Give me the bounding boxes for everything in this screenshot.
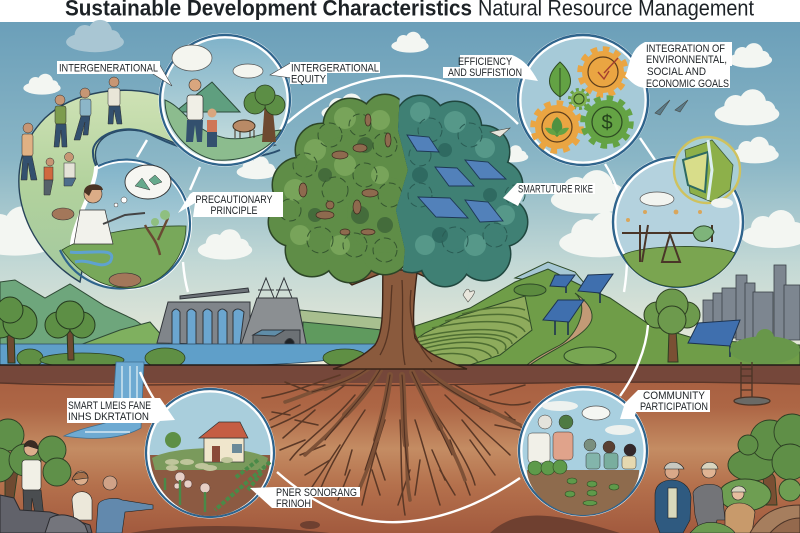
label: efficiency and sufficiency: EFFICIENCY bbox=[458, 56, 512, 68]
label: precautionary principle: PRECAUTIONARY bbox=[196, 194, 272, 206]
S-shaped ribbon panel: intergenerational equity and precaution bbox=[19, 90, 280, 282]
circle panel: efficiency and goals gears bbox=[518, 35, 648, 165]
circle panel: intergenerational equity bbox=[160, 35, 290, 165]
clouds bbox=[0, 20, 800, 260]
background sky bbox=[0, 22, 800, 367]
hills left bbox=[0, 280, 382, 345]
hydro dam bbox=[157, 278, 307, 350]
circle panel: farm and smart land use bbox=[146, 389, 274, 517]
label: community participation: PARTICIPATION bbox=[640, 401, 708, 413]
gear: sprout bbox=[533, 103, 581, 151]
circle panel: weather and climate with globe bbox=[613, 157, 743, 287]
canopy left half: ecosystem bbox=[268, 94, 408, 284]
circle panel: community participation bbox=[519, 387, 647, 515]
small birds and leaves bbox=[463, 100, 688, 302]
canopy right half: solar panels bbox=[379, 96, 527, 286]
city skyline bbox=[703, 265, 800, 343]
label: efficiency and sufficiency: AND SUFFISTION bbox=[448, 67, 522, 79]
tree canopy bbox=[269, 95, 527, 286]
white connecting ring bbox=[137, 76, 657, 522]
solar panels on hill bbox=[543, 274, 740, 357]
label: lower right of farm circle: FRINOH bbox=[276, 498, 311, 510]
people bottom left bbox=[22, 440, 153, 533]
label: lower right of farm circle: PNER SONORANG bbox=[276, 487, 357, 499]
label: intergenerational: INTERGENERATIONAL bbox=[59, 62, 158, 74]
label: integration of goals bbox=[625, 42, 732, 90]
label: integration of goals: ENVIRONNENTAL, bbox=[646, 54, 727, 66]
label: smart infrastructure bbox=[503, 183, 595, 206]
label: lower right of farm circle bbox=[250, 487, 360, 510]
label: smart infrastructure: SMARTUTURE RIKE bbox=[518, 184, 593, 196]
rocks bottom right bbox=[750, 505, 800, 533]
shrubs far right bbox=[730, 329, 800, 364]
tree on right hill bbox=[644, 289, 700, 362]
label: community participation bbox=[620, 390, 710, 419]
foreground tree bottom right bbox=[719, 414, 800, 511]
label: precautionary principle: PRINCIPLE bbox=[210, 205, 258, 217]
label: integration of goals: SOCIAL AND bbox=[647, 66, 706, 78]
tree trunk bbox=[318, 250, 470, 369]
gear: small connector bbox=[570, 90, 588, 108]
gear: target bbox=[580, 49, 626, 95]
label: smart land use bbox=[67, 398, 175, 423]
label: precautionary principle bbox=[178, 192, 283, 217]
people bottom right bbox=[655, 462, 755, 533]
trees left of dam bbox=[0, 297, 95, 363]
label: smart land use: SMART LMEIS FANE bbox=[68, 400, 151, 412]
people walking on ribbon bbox=[21, 77, 122, 195]
right hill with terraces bbox=[415, 262, 800, 365]
title bbox=[0, 0, 800, 22]
circle panel: precautionary principle bbox=[52, 160, 190, 288]
label: intergenerational bbox=[57, 61, 172, 86]
label: intergenerational equity: EQUITY bbox=[291, 74, 326, 86]
waterfall bbox=[64, 362, 144, 438]
riverbank bushes bbox=[17, 348, 367, 368]
label: smart land use: INHS DKRTATION bbox=[68, 411, 149, 423]
river bbox=[0, 344, 382, 365]
leaf icon bbox=[550, 62, 570, 100]
label: integration of goals: ECONOMIC GOALS bbox=[646, 78, 729, 90]
icon: cracked globe bbox=[674, 137, 740, 208]
label: efficiency and sufficiency bbox=[443, 55, 538, 81]
tree roots bbox=[262, 365, 535, 515]
label: intergenerational equity bbox=[270, 62, 380, 86]
gear: dollar: $ bbox=[601, 112, 613, 134]
soil cross-section bbox=[0, 365, 800, 533]
label: community participation: COMMUNITY bbox=[643, 390, 705, 402]
foreground tree bottom left bbox=[0, 419, 71, 498]
label: intergenerational equity: INTERGERATIONAL bbox=[291, 62, 379, 74]
ladder bbox=[734, 362, 770, 405]
label: integration of goals: INTEGRATION OF bbox=[646, 43, 725, 55]
rocks bottom left bbox=[0, 495, 92, 533]
